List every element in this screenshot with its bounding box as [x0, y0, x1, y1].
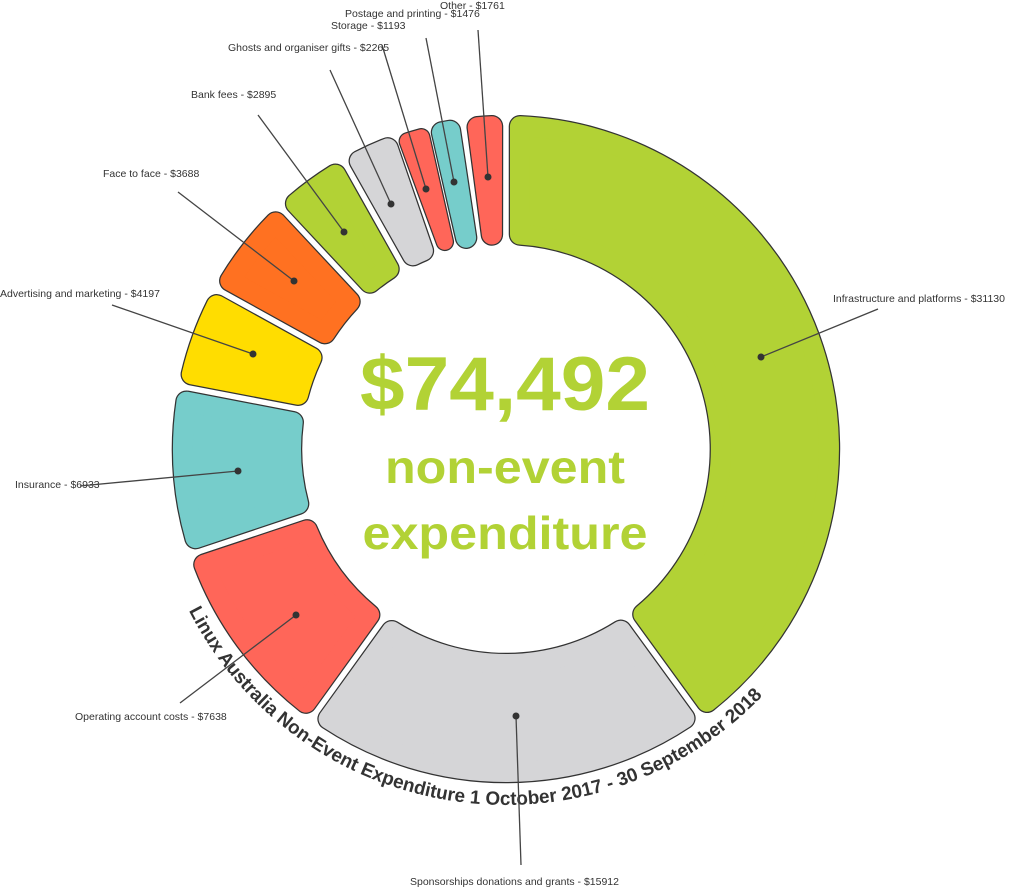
label: ghosts [228, 42, 394, 208]
label: sponsorships: Sponsorships donations and grants - $15912 [410, 876, 619, 888]
segment: ghosts [360, 148, 423, 255]
label: other: Other - $1761 [440, 0, 505, 12]
label: sponsorships [410, 712, 619, 888]
label: storage [331, 20, 430, 192]
donut chart [183, 126, 829, 772]
center total [360, 342, 650, 559]
center total: non-event [385, 441, 625, 493]
center total: expenditure [362, 507, 648, 559]
curved title: Linux Australia Non-Event Expenditure 1 October 2017 - 30 September 2018 [189, 606, 761, 806]
segment: infrastructure [520, 126, 829, 702]
label: advertising: Advertising and marketing - $4197 [0, 288, 160, 300]
label: insurance [15, 468, 242, 491]
label: bank fees: Bank fees - $2895 [191, 89, 276, 101]
label: face to face: Face to face - $3688 [103, 168, 199, 180]
label: postage [345, 8, 480, 186]
label: infrastructure: Infrastructure and platforms - $31130 [833, 293, 1005, 305]
label: operating [75, 612, 300, 723]
segment: postage [442, 131, 466, 238]
label: insurance: Insurance - $6933 [15, 479, 100, 491]
label: postage: Postage and printing - $1476 [345, 8, 480, 20]
label: operating: Operating account costs - $7638 [75, 711, 227, 723]
label: storage: Storage - $1193 [331, 20, 406, 32]
center total: $74,492 [360, 342, 650, 427]
segment: sponsorships [329, 631, 684, 772]
label: ghosts: Ghosts and organiser gifts - $2265 [228, 42, 389, 54]
label: bank fees [191, 89, 348, 236]
label: infrastructure [758, 293, 1005, 360]
segment: bank fees [296, 175, 388, 282]
segment: insurance [183, 402, 298, 538]
label: face to face [103, 168, 298, 284]
segment: storage [408, 137, 445, 242]
segment: face to face [230, 222, 350, 333]
segment: operating [204, 530, 369, 703]
label: advertising [0, 288, 256, 358]
segment: advertising [192, 305, 311, 395]
label: other [440, 0, 505, 180]
segment: other [478, 126, 492, 234]
